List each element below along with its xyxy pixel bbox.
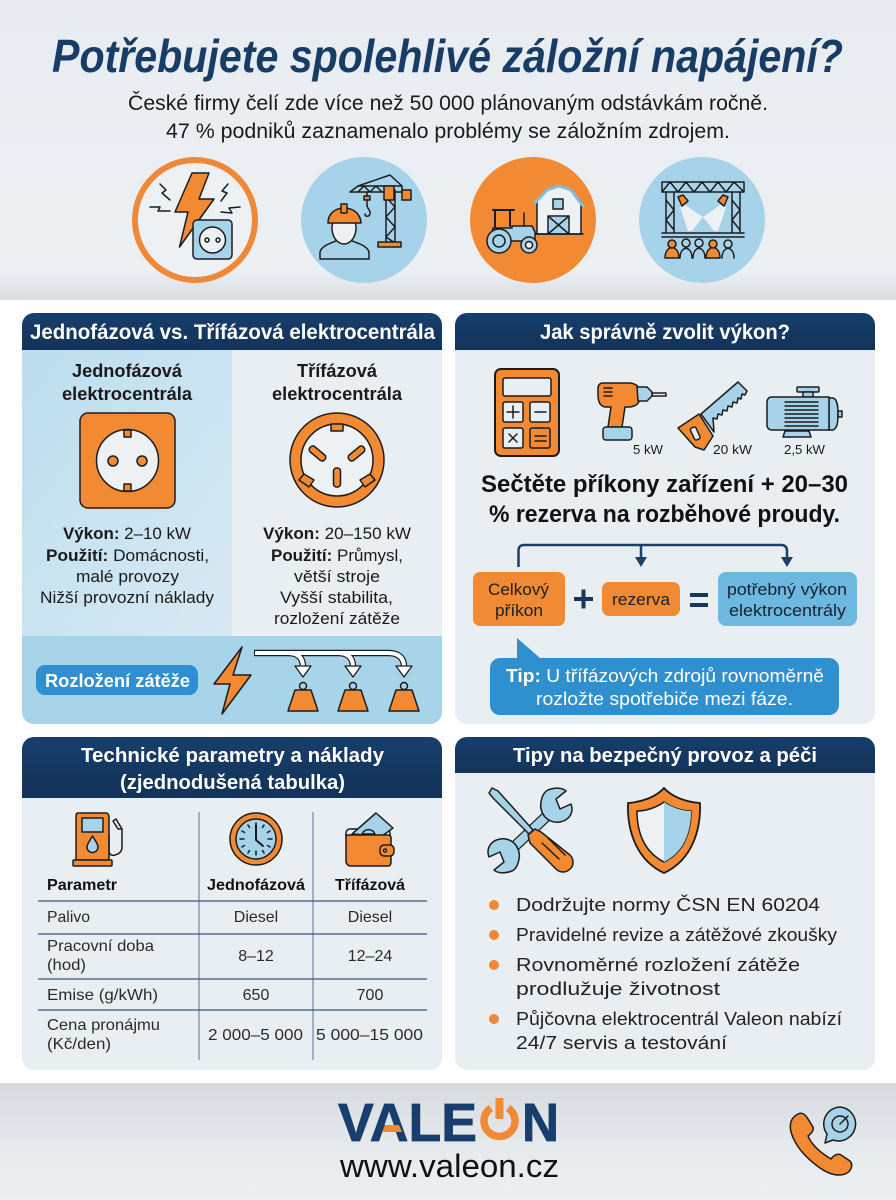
website: www.valeon.cz <box>339 1148 559 1184</box>
icon: wallet <box>346 813 394 866</box>
formula: equals <box>690 595 708 605</box>
panel: safety tips <box>455 737 875 1070</box>
logo: Valeon: N <box>522 1093 559 1153</box>
intro text: České firmy čelí zde více než 50 000 plánovaným odstávkám ročně. <box>128 90 768 115</box>
icon: drill <box>598 383 666 440</box>
table: Parametr <box>47 877 117 894</box>
key message: Sečtěte příkony zařízení + 20–30 <box>481 471 848 498</box>
table: Pracovní doba <box>47 938 154 955</box>
panel heading: Technické parametry a náklady <box>81 744 385 767</box>
formula: required power: potřebný výkon <box>727 580 847 599</box>
bullet list: Půjčovna elektrocentrál Valeon nabízí <box>516 1008 843 1029</box>
load distribution label: Rozložení zátěže <box>45 670 190 691</box>
column: single phase: Použití: Domácnosti, <box>46 546 209 565</box>
logo: Valeon <box>338 1093 559 1153</box>
column: single phase <box>40 360 214 607</box>
table: (Kč/den) <box>47 1036 111 1053</box>
column: three phase: Výkon: 20–150 kW <box>263 524 411 543</box>
panel heading: Tipy na bezpečný provoz a péči <box>513 744 817 767</box>
table: (hod) <box>47 957 86 974</box>
column: three phase: Použití: Průmysl, <box>271 546 403 565</box>
table: 8–12 <box>238 948 274 965</box>
icon: saw <box>678 382 747 450</box>
column: single phase: Jednofázová <box>72 360 183 381</box>
arrows: formula bracket <box>518 545 793 567</box>
table: Cena pronájmu <box>47 1017 160 1034</box>
icon: motor <box>767 387 842 437</box>
table: Palivo <box>47 909 90 926</box>
formula: total input: Celkový <box>488 580 549 599</box>
load distribution label <box>36 665 198 695</box>
panel: single vs three phase <box>22 313 442 724</box>
icon: shield <box>628 788 700 873</box>
table: Jednofázová <box>207 877 305 894</box>
formula: total input <box>473 572 565 626</box>
callout: tip: Tip: U třífázových zdrojů rovnoměrně <box>506 666 824 686</box>
icon: calculator <box>495 369 559 456</box>
icon: clock <box>230 813 282 865</box>
icon: tools <box>488 788 573 873</box>
callout: tip <box>490 638 839 715</box>
icon: fuel pump <box>73 813 122 866</box>
column: three phase: rozložení zátěže <box>274 609 400 628</box>
bullet list: Pravidelné revize a zátěžové zkoušky <box>516 924 838 945</box>
bullet list: 24/7 servis a testování <box>516 1032 728 1053</box>
table: 12–24 <box>348 948 392 965</box>
key message <box>481 471 848 528</box>
formula: required power: elektrocentrály <box>729 601 847 620</box>
table: 650 <box>243 987 269 1004</box>
key message: % rezerva na rozběhové proudy. <box>489 501 840 528</box>
icon: construction <box>301 157 427 283</box>
panel heading: Jednofázová vs. Třífázová elektrocentrála <box>30 321 435 344</box>
panel heading: (zjednodušená tabulka) <box>120 771 345 794</box>
arrows: load distribution <box>254 653 412 677</box>
icon: single phase socket <box>80 413 175 508</box>
table: 2 000–5 000 <box>208 1027 303 1044</box>
icon: power outage <box>135 160 255 280</box>
label: drill power: 5 kW <box>633 442 664 457</box>
formula: reserve: rezerva <box>612 590 671 609</box>
bullet list: Dodržujte normy ČSN EN 60204 <box>516 894 820 915</box>
column: single phase: Výkon: 2–10 kW <box>63 524 191 543</box>
icons: weights <box>288 682 419 711</box>
table: Emise (g/kWh) <box>47 987 158 1004</box>
table: Diesel <box>348 909 392 926</box>
icon: agriculture <box>470 157 596 283</box>
icon: three phase socket <box>290 413 384 507</box>
column: three phase: Vyšší stabilita, <box>280 588 393 607</box>
table: Třífázová <box>335 877 405 894</box>
column: three phase: větší stroje <box>294 567 380 586</box>
panel: choosing power <box>455 313 875 724</box>
icon: load bolt <box>214 647 251 714</box>
table <box>38 812 427 1060</box>
column: three phase <box>263 360 411 628</box>
logo: Valeon: VALE <box>338 1093 477 1153</box>
formula: total input: příkon <box>495 601 543 620</box>
intro text: 47 % podniků zaznamenalo problémy se záložním zdrojem. <box>166 119 730 143</box>
formula: required power <box>718 572 857 626</box>
column: three phase: Třífázová <box>297 360 378 381</box>
intro text <box>128 90 768 143</box>
panel heading: Jak správně zvolit výkon? <box>540 321 790 344</box>
label: saw power: 20 kW <box>713 442 753 457</box>
bullet list: Rovnoměrné rozložení zátěže <box>516 954 800 975</box>
label: motor power: 2,5 kW <box>784 442 826 457</box>
icon: phone <box>790 1107 856 1175</box>
column: single phase: malé provozy <box>76 567 179 586</box>
column: three phase: elektrocentrála <box>272 383 403 404</box>
icon: event stage <box>639 157 765 283</box>
table: 700 <box>357 987 383 1004</box>
callout: tip: rozložte spotřebiče mezi fáze. <box>536 689 793 709</box>
panel heading <box>81 744 385 794</box>
column: single phase: elektrocentrála <box>62 383 193 404</box>
formula: reserve <box>602 582 680 616</box>
table: Diesel <box>234 909 278 926</box>
bullet list: prodlužuje životnost <box>516 978 720 999</box>
table: 5 000–15 000 <box>316 1027 423 1044</box>
formula: plus <box>574 590 593 608</box>
panel: technical parameters <box>22 737 442 1070</box>
column: single phase: Nižší provozní náklady <box>40 588 214 607</box>
bullet list <box>489 894 843 1053</box>
